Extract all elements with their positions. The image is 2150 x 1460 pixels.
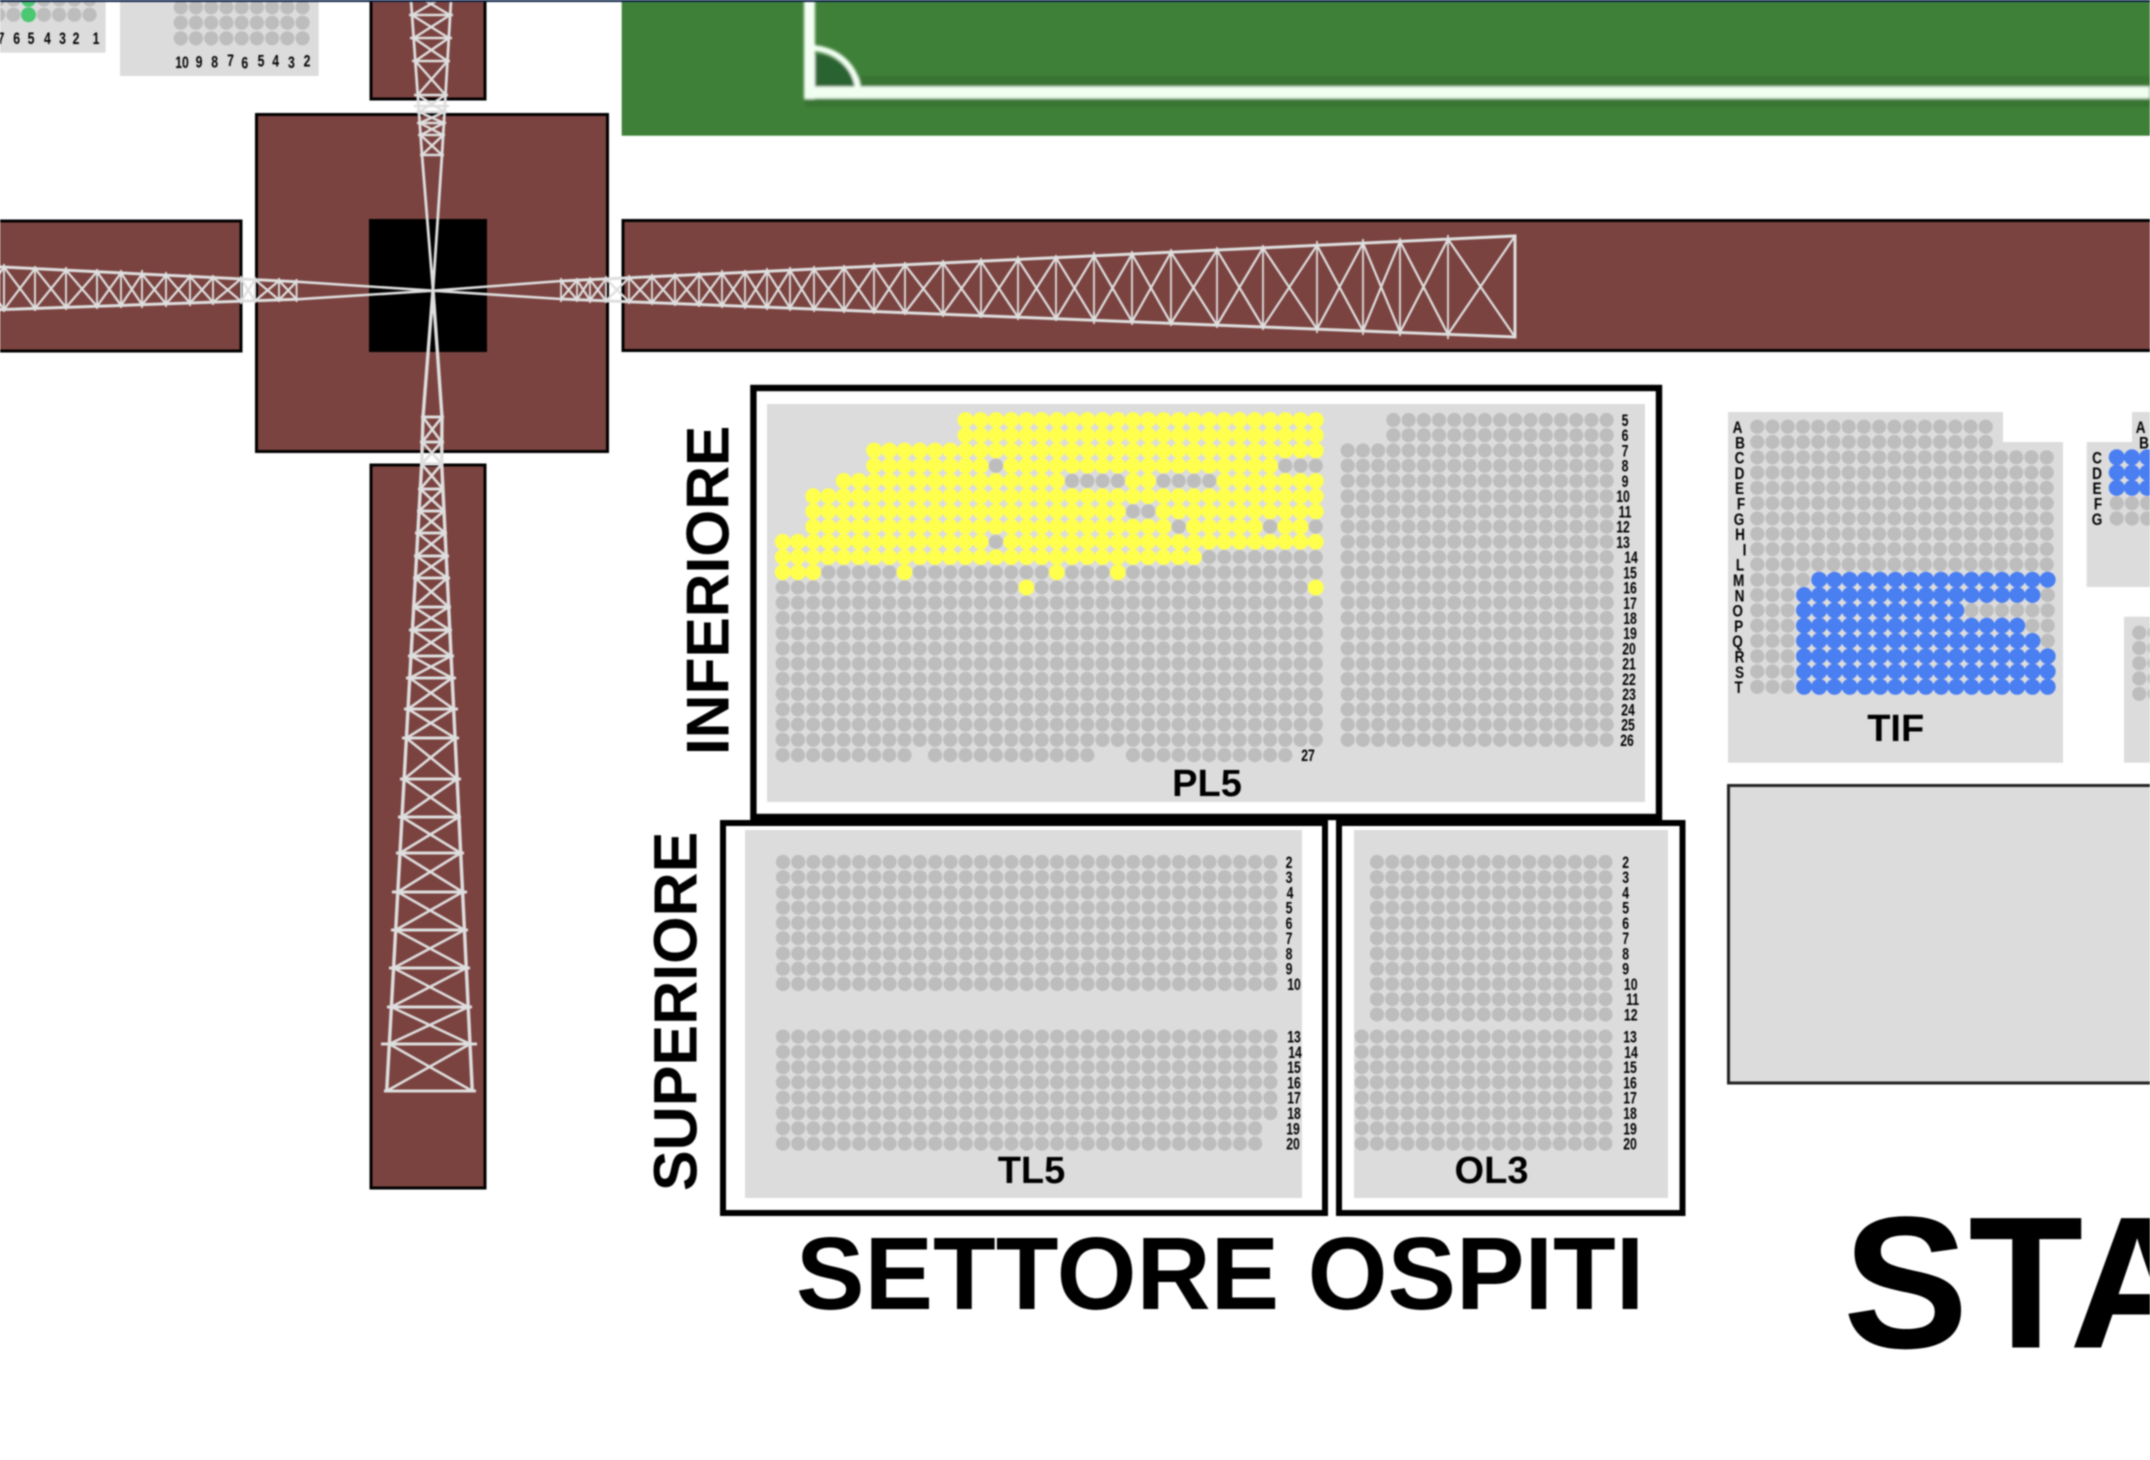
row numbers PL5: 13: [1616, 534, 1630, 552]
row numbers PL5: 15: [1623, 565, 1637, 583]
row letters TIF: R: [1735, 648, 1744, 667]
row numbers block 1: 2: [73, 30, 79, 49]
row numbers OL3: 10: [1624, 976, 1638, 995]
row numbers TL5: 3: [1286, 869, 1292, 888]
row numbers OL3: 3: [1622, 869, 1629, 888]
row letters TIF: E: [1735, 480, 1744, 499]
row numbers PL5: 10: [1616, 488, 1630, 507]
row numbers PL5: 27: [1301, 747, 1315, 766]
row letters TIF: [1732, 419, 1746, 698]
tower base bottom: [371, 465, 485, 1188]
TL5 label: TL5: [998, 1150, 1065, 1192]
row numbers block 2: 3: [288, 54, 295, 73]
row numbers OL3: 20: [1623, 1136, 1637, 1154]
row numbers OL3: 5: [1622, 900, 1629, 918]
row numbers TL5: 9: [1286, 961, 1292, 979]
row letters adjacent block: B: [2139, 434, 2149, 453]
row numbers TL5: 5: [1286, 900, 1292, 918]
row numbers block 1: 6: [13, 30, 20, 49]
row numbers TL5: 16: [1287, 1075, 1301, 1093]
row numbers OL3: 19: [1623, 1121, 1637, 1139]
grey seats PL5 right block: [1348, 420, 1607, 740]
row letters TIF: S: [1735, 663, 1744, 682]
row numbers block 2: 6: [241, 55, 248, 73]
hub black square: [369, 219, 487, 352]
panel: TL5: [723, 823, 1325, 1213]
row letters adjacent block: F: [2094, 495, 2102, 514]
PL5 label: PL5: [1172, 763, 1242, 805]
grey seats TIF: [1757, 427, 2048, 687]
row numbers TL5: 2: [1286, 854, 1292, 873]
row numbers OL3: 11: [1626, 991, 1639, 1010]
row numbers block 1: 3: [59, 30, 66, 49]
row numbers PL5: 7: [1622, 443, 1628, 461]
row letters TIF: M: [1733, 572, 1744, 590]
row numbers PL5: 6: [1622, 427, 1628, 446]
panel: lower block right (partial): [2124, 617, 2150, 763]
truss left: [0, 264, 297, 312]
row numbers block 2: 10: [175, 54, 189, 73]
row numbers block 2: 8: [211, 54, 218, 72]
row numbers OL3: 6: [1622, 915, 1629, 934]
row numbers PL5: 25: [1621, 717, 1635, 735]
panel: OL3: [1339, 823, 1682, 1213]
row letters adjacent block: A: [2136, 419, 2146, 437]
row numbers TL5: 17: [1287, 1090, 1301, 1108]
row numbers TL5: 18: [1287, 1105, 1301, 1124]
row letters TIF: N: [1735, 587, 1744, 606]
row letters TIF: B: [1735, 434, 1745, 453]
row numbers TL5: 14: [1288, 1044, 1302, 1063]
row letters adjacent block: D: [2092, 465, 2102, 483]
row numbers OL3: 18: [1623, 1105, 1637, 1124]
row numbers TL5: 8: [1286, 946, 1292, 964]
row numbers TL5: 20: [1286, 1136, 1300, 1154]
row numbers OL3: 12: [1624, 1007, 1638, 1025]
row numbers PL5: 21: [1622, 656, 1636, 674]
tower base top: [371, 0, 485, 99]
row numbers PL5: 19: [1623, 625, 1637, 644]
row numbers PL5: 11: [1619, 504, 1631, 522]
grey seats TL5: [783, 862, 1271, 1144]
truss top: [409, 0, 453, 290]
row numbers PL5: 17: [1623, 595, 1637, 613]
row numbers block 1: 4: [44, 30, 51, 49]
row numbers PL5: 5: [1622, 412, 1628, 431]
row numbers TL5: [1286, 854, 1302, 1154]
tower base right: [623, 220, 2150, 350]
row letters TIF: T: [1735, 679, 1743, 698]
hub base: [256, 114, 608, 452]
row numbers block 1: [0, 30, 99, 49]
row numbers OL3: 4: [1622, 885, 1630, 903]
blue seats TIF: [1804, 580, 2048, 687]
row numbers OL3: [1622, 854, 1639, 1154]
panel: empty grey box: [1728, 786, 2150, 1083]
tower base left: [0, 221, 241, 351]
row numbers OL3: 2: [1622, 854, 1629, 873]
row numbers block 2: 7: [227, 52, 234, 71]
row letters TIF: O: [1732, 602, 1743, 621]
blue seats adjacent block: [2117, 457, 2150, 488]
grey seats PL5 left block: [783, 466, 1316, 755]
row letters adjacent block: G: [2092, 510, 2102, 529]
row numbers OL3: 15: [1623, 1059, 1637, 1078]
row letters TIF: Q: [1732, 633, 1743, 652]
row numbers TL5: 6: [1286, 915, 1292, 934]
grey seats adjacent block: [2117, 503, 2150, 518]
row numbers TL5: 13: [1287, 1029, 1301, 1047]
row letters TIF: A: [1733, 419, 1742, 437]
row numbers block 2: [175, 52, 310, 73]
heading: SETTORE OSPITI: SETTORE OSPITI: [796, 1216, 1644, 1331]
row numbers PL5: 26: [1620, 732, 1634, 750]
row letters adjacent block: E: [2092, 480, 2102, 499]
row numbers PL5: 8: [1622, 458, 1628, 476]
row numbers OL3: 16: [1623, 1075, 1637, 1093]
yellow seats PL5: [783, 420, 1316, 588]
row numbers OL3: 7: [1622, 930, 1629, 949]
row letters TIF: I: [1743, 541, 1746, 560]
row letters TIF: L: [1736, 556, 1744, 575]
row numbers OL3: 14: [1624, 1044, 1638, 1063]
row numbers block 2: 5: [258, 53, 264, 71]
row numbers OL3: 9: [1622, 961, 1629, 979]
row numbers PL5: 22: [1622, 671, 1636, 689]
row numbers OL3: 13: [1623, 1029, 1637, 1047]
row numbers PL5: 9: [1622, 473, 1628, 491]
pitch corner: [622, 0, 2150, 136]
row letters TIF: D: [1735, 465, 1744, 483]
row numbers PL5: 16: [1623, 580, 1637, 598]
row numbers TL5: 10: [1287, 976, 1301, 995]
truss bottom: [381, 290, 477, 1091]
row numbers PL5: 24: [1621, 702, 1635, 720]
TIF label: TIF: [1867, 708, 1924, 750]
row numbers PL5: 18: [1623, 610, 1637, 629]
truss right: [297, 235, 1515, 339]
row letters TIF: P: [1734, 618, 1743, 636]
row numbers block 2: 4: [272, 53, 280, 71]
top edge line: [0, 0, 2150, 2]
row numbers block 1: 1: [93, 30, 99, 49]
row numbers PL5: 23: [1622, 686, 1636, 705]
row numbers OL3: 17: [1623, 1090, 1637, 1108]
row numbers block 2: 2: [304, 53, 310, 71]
row numbers PL5: 14: [1624, 549, 1638, 568]
panel: adjacent block right (partial): [2087, 412, 2150, 587]
row numbers TL5: 19: [1286, 1121, 1300, 1139]
grey seats OL3: [1362, 862, 1606, 1144]
row numbers OL3: 8: [1622, 946, 1629, 964]
row numbers TL5: 15: [1287, 1059, 1301, 1078]
row letters TIF: G: [1734, 510, 1744, 529]
row numbers TL5: 4: [1287, 885, 1294, 903]
row numbers PL5: 20: [1622, 641, 1636, 659]
row numbers TL5: 7: [1286, 930, 1292, 949]
row letters TIF: H: [1735, 526, 1745, 545]
panel: TIF: [1728, 412, 2063, 763]
heading: SUPERIORE: SUPERIORE: [642, 832, 710, 1191]
OL3 label: OL3: [1455, 1150, 1528, 1192]
row letters TIF: C: [1735, 449, 1744, 468]
row numbers PL5: 12: [1616, 519, 1630, 537]
panel: PL5: [753, 388, 1659, 817]
row letters TIF: F: [1737, 495, 1745, 514]
heading: INFERIORE: INFERIORE: [674, 426, 742, 755]
row numbers block 2: 9: [196, 54, 202, 72]
row letters adjacent block: C: [2092, 449, 2102, 468]
row letters adjacent block: [2092, 419, 2149, 529]
row numbers block 1: 5: [28, 30, 34, 49]
row numbers PL5: [1301, 412, 1638, 766]
seating block top left (partial): [0, 0, 106, 53]
seating block top left 2 (partial): [120, 0, 319, 76]
